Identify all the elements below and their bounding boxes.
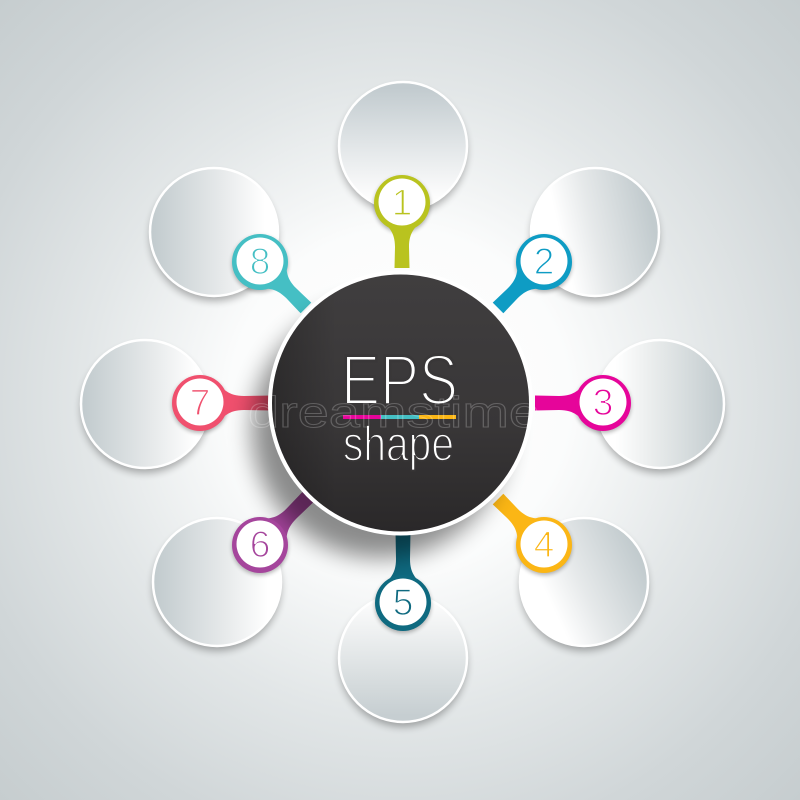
hub subheading: shape xyxy=(343,418,454,472)
badge 7 xyxy=(172,375,228,431)
badge 2: 2 xyxy=(534,241,554,282)
stem 7 xyxy=(212,379,272,427)
badge 4 xyxy=(516,517,572,573)
badge 1 xyxy=(374,175,430,231)
tricolour rule xyxy=(343,415,456,419)
circle panel 3 xyxy=(596,340,724,473)
satellite circles xyxy=(81,82,724,727)
badge 4: 4 xyxy=(534,524,554,565)
badge 5: 5 xyxy=(393,582,413,623)
stem 1 xyxy=(378,215,426,268)
badge 3 xyxy=(575,375,631,431)
central hub xyxy=(268,270,533,536)
connector stems xyxy=(212,215,591,591)
badge 7: 7 xyxy=(190,382,210,423)
circle panel 1 xyxy=(339,82,467,215)
hub heading: EPS xyxy=(341,342,458,420)
circle panel 7 xyxy=(81,340,209,473)
stem 4 xyxy=(481,482,552,553)
badge 3: 3 xyxy=(593,382,613,423)
circle panel 4 xyxy=(520,518,648,651)
circle panel 2 xyxy=(531,168,659,301)
stem 3 xyxy=(535,379,591,427)
stem 2 xyxy=(481,254,552,325)
stem 5 xyxy=(379,531,427,591)
badge 8 xyxy=(232,234,288,290)
badge 6 xyxy=(232,517,288,573)
circle panel 5 xyxy=(339,594,467,727)
hub drop shadow xyxy=(252,302,508,558)
badge 5 xyxy=(375,575,431,631)
circle panel 8 xyxy=(150,168,278,301)
badge 6: 6 xyxy=(250,524,270,565)
stem 6 xyxy=(252,480,325,553)
badge 8: 8 xyxy=(250,241,270,282)
watermark: dreamstime xyxy=(248,388,540,437)
number badges xyxy=(172,175,631,631)
badge 1: 1 xyxy=(392,182,412,223)
badge shadows xyxy=(172,177,631,633)
badge 2 xyxy=(516,234,572,290)
stem 8 xyxy=(252,254,323,325)
circle panel 6 xyxy=(153,518,281,651)
